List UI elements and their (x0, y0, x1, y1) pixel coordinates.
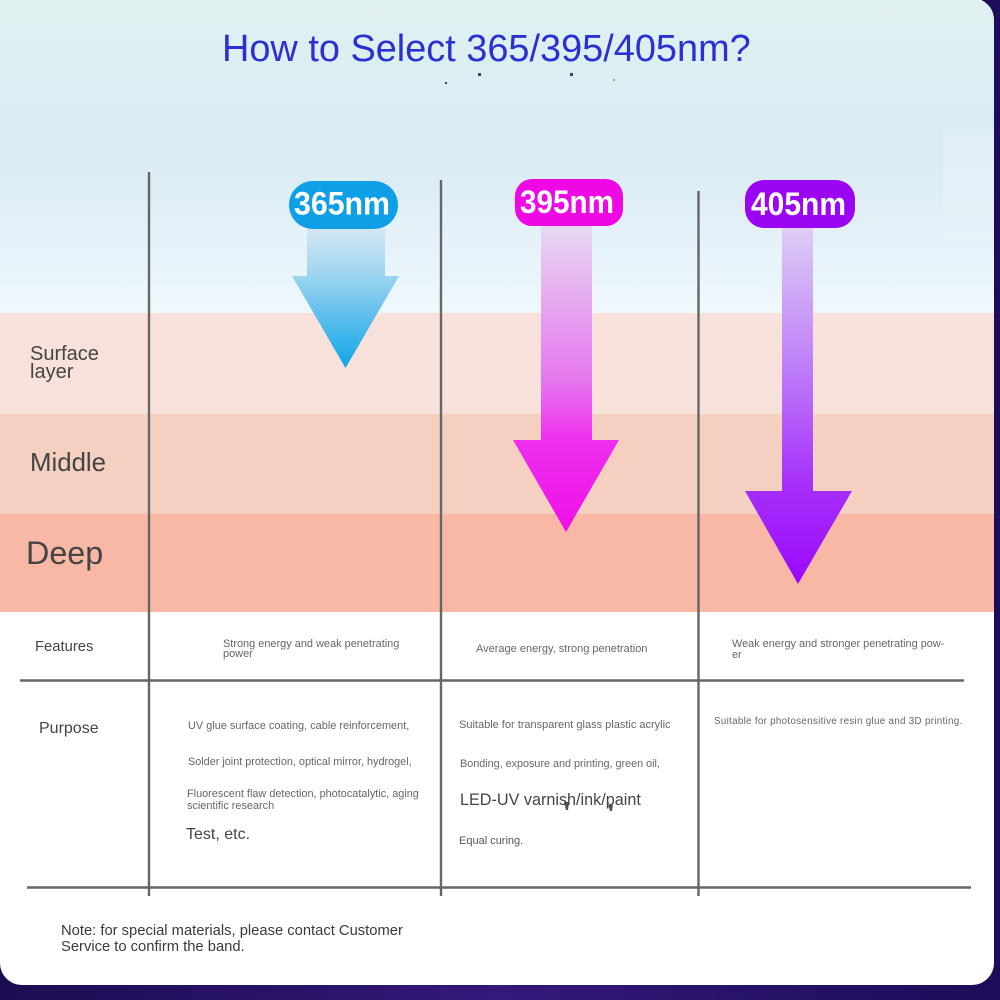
table lines (20, 172, 971, 896)
label: middle: Middle (30, 448, 106, 476)
purpose: 395nm: LED-UV varnish/ink/paint (460, 791, 641, 809)
sky background (0, 0, 994, 313)
label: surface layer (30, 343, 99, 383)
surface layer band (0, 313, 994, 414)
purpose: 365nm: UV glue surface coating, cable reinforcement, (188, 720, 409, 732)
purpose: 365nm: scientific research (187, 800, 274, 812)
purpose: 395nm (459, 719, 671, 847)
features: 405nm: Weak energy and stronger penetrating pow- (732, 638, 944, 650)
features: 365nm: Strong energy and weak penetrating (223, 638, 399, 650)
deep layer band (0, 514, 994, 612)
note (61, 923, 403, 955)
purpose: 365nm: Fluorescent flaw detection, photocatalytic, aging (187, 788, 419, 800)
label: surface layer: Surface (30, 343, 99, 365)
badge: 365nm (289, 181, 398, 229)
label: deep: Deep (26, 535, 103, 571)
features: 405nm: er (732, 649, 742, 661)
arrow: 395nm (513, 179, 623, 532)
purpose: 365nm (186, 720, 419, 843)
purpose: 395nm: Equal curing. (459, 835, 523, 847)
middle layer band (0, 414, 994, 514)
badge: 405nm: 405nm (751, 186, 846, 222)
features: 365nm (223, 638, 399, 660)
pale patch at right of sky (943, 130, 994, 240)
label: features: Features (35, 639, 93, 655)
title: How to Select 365/395/405nm? (222, 28, 751, 70)
purpose: 365nm: Test, etc. (186, 826, 250, 843)
purpose: 405nm: Suitable for photosensitive resin glue and 3D printing. (714, 716, 963, 727)
purpose: 395nm: Suitable for transparent glass plastic acrylic (459, 719, 671, 731)
purpose: 395nm: Bonding, exposure and printing, green oil, (460, 758, 660, 770)
arrow: 405nm (745, 180, 855, 584)
note: Service to confirm the band. (61, 939, 245, 955)
badge: 405nm (745, 180, 855, 228)
badge: 395nm: 395nm (520, 184, 614, 220)
features: 405nm (732, 638, 944, 661)
note: Note: for special materials, please contact Customer (61, 923, 403, 939)
stray marks near varnish text (564, 802, 613, 811)
purpose: 365nm: Solder joint protection, optical mirror, hydrogel, (188, 756, 412, 768)
features: 365nm: power (223, 648, 253, 660)
label: surface layer: layer (30, 361, 73, 383)
features: 395nm: Average energy, strong penetration (476, 643, 647, 655)
label: purpose: Purpose (39, 720, 99, 736)
arrow: 365nm (289, 181, 399, 368)
badge: 365nm: 365nm (294, 186, 390, 222)
stray marks under title (445, 73, 615, 84)
